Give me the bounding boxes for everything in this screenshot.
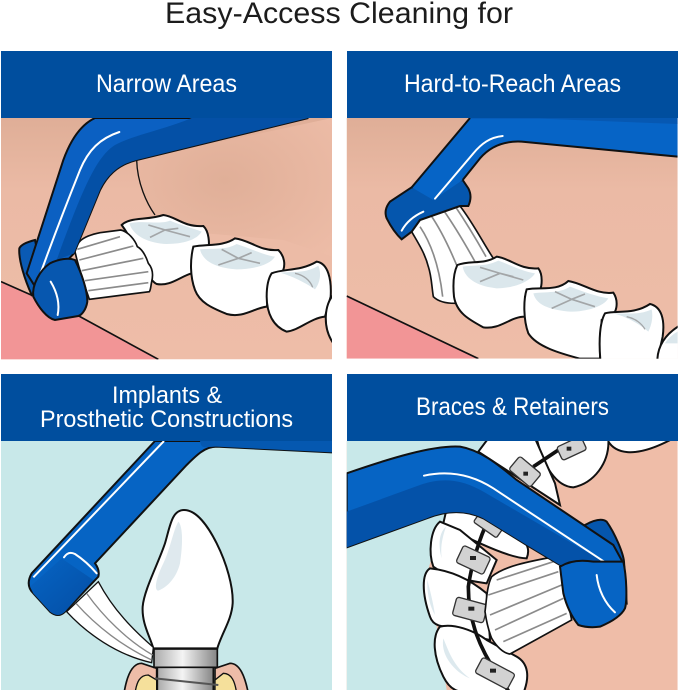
implant crown [143,510,233,648]
handle [27,118,308,292]
brush head back [585,520,627,603]
handle [347,447,623,565]
molar 2 [191,238,284,315]
panel: hard-to-reach areas [347,51,679,363]
illustration: brush on braces [347,436,678,690]
panel: narrow areas [1,51,333,359]
heading: braces and retainers [347,374,678,441]
brush head [386,180,470,239]
bristles [75,230,153,299]
molar 3 [267,262,333,343]
heading: implants and prosthetic constructions: Prosthetic Constructions [40,406,293,433]
illustration: brush on narrow areas [1,118,333,359]
brush head front [33,259,87,320]
bristles [485,556,572,654]
heading: implants and prosthetic constructions: Implants & [112,382,222,409]
illustration: brush on implant [1,441,332,690]
teeth [424,438,673,690]
molar 3 [600,304,679,363]
bristles [67,582,153,663]
brush head front [560,561,626,627]
handle [412,118,678,200]
heading: narrow areas [1,51,332,118]
molar 1 [453,257,542,328]
heading: hard-to-reach areas [347,51,678,118]
implant screw [154,649,218,690]
molar 1 [122,215,209,284]
handle and brush head [29,441,332,615]
brackets [452,436,587,690]
heading: narrow areas: Narrow Areas [96,70,237,98]
illustration: brush on hard-to-reach areas [347,118,679,363]
archwire [468,447,563,690]
brush head back [18,238,36,296]
heading: implants and prosthetic constructions [1,374,332,441]
molar 2 [524,281,617,359]
panel: implants and prosthetic constructions [1,374,332,690]
bristles [412,206,493,303]
heading: braces and retainers: Braces & Retainers [416,393,609,421]
heading: hard-to-reach areas: Hard-to-Reach Areas [404,70,621,98]
gum and bone [124,663,248,690]
panel: braces and retainers [347,374,678,690]
